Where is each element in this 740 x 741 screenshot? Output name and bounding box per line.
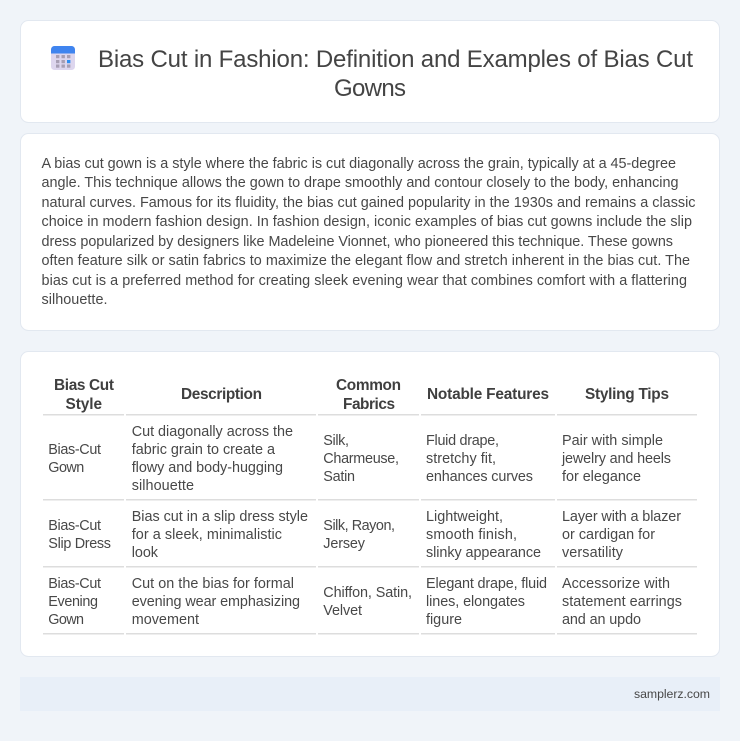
table row: bias-cut evening gown: movement bbox=[132, 612, 199, 628]
table row: bias-cut gown: enhances curves bbox=[426, 469, 533, 485]
table header: Description bbox=[181, 386, 262, 403]
text block: definition paragraph: angle. This technique allows the gown to drape smoothly and contour closely to the body, enhancing bbox=[42, 175, 678, 191]
table row: bias-cut evening gown: Gown bbox=[48, 612, 84, 628]
table row: bias-cut gown: fabric grain to create a bbox=[132, 442, 275, 458]
table header: Common bbox=[336, 377, 401, 394]
table row: bias-cut gown: silhouette bbox=[132, 478, 194, 494]
table row: bias-cut gown: Satin bbox=[323, 469, 355, 485]
footer bbox=[20, 677, 720, 711]
table row: bias-cut gown: Silk, bbox=[323, 433, 349, 449]
table header: Notable Features bbox=[427, 386, 549, 403]
table row: bias-cut gown: for elegance bbox=[562, 469, 641, 485]
table row: bias-cut slip dress: or cardigan for bbox=[562, 527, 655, 543]
text block: definition paragraph: often feature silk or satin fabrics to maximize the elegant flow and stretch inherent in the bias cut. The bbox=[42, 253, 690, 269]
text block: definition paragraph: A bias cut gown is a style where the fabric is cut diagonally across the grain, typically at a 45-degree bbox=[42, 156, 676, 172]
text block: definition paragraph: choice in modern fashion design. In fashion design, iconic examples of bias cut gowns include the slip bbox=[42, 214, 692, 230]
table row: bias-cut evening gown: Chiffon, Satin, bbox=[323, 585, 412, 601]
table row: bias-cut slip dress: slinky appearance bbox=[426, 545, 541, 561]
table row: bias-cut slip dress: versatility bbox=[562, 545, 624, 561]
table row: bias-cut slip dress: Lightweight, bbox=[426, 509, 503, 525]
footer: samplerz.com bbox=[634, 687, 710, 701]
table header bbox=[43, 377, 697, 416]
text block: definition paragraph: dress popularized by designers like Madeleine Vionnet, who pioneered this technique. These gowns bbox=[42, 234, 673, 250]
table row: bias-cut gown: stretchy fit, bbox=[426, 451, 496, 467]
title bbox=[98, 46, 693, 102]
table row: bias-cut evening gown: evening wear emphasizing bbox=[132, 594, 300, 610]
table row: bias-cut evening gown: Velvet bbox=[323, 603, 362, 619]
table row: bias-cut slip dress: Slip Dress bbox=[48, 536, 111, 552]
title: Bias Cut in Fashion: Definition and Examples of Bias Cut bbox=[98, 46, 693, 73]
title: Gowns bbox=[334, 75, 406, 102]
table row: bias-cut evening gown: Accessorize with bbox=[562, 576, 670, 592]
table header: Style bbox=[66, 396, 102, 413]
table row: bias-cut slip dress bbox=[43, 509, 697, 568]
panel: introduction text bbox=[20, 134, 720, 330]
table row: bias-cut evening gown: Bias-Cut bbox=[48, 576, 101, 592]
table row: bias-cut gown: Charmeuse, bbox=[323, 451, 399, 467]
panel: bias cut styles table bbox=[20, 352, 720, 656]
table row: bias-cut slip dress: Layer with a blazer bbox=[562, 509, 681, 525]
table row: bias-cut slip dress: for a sleek, minimalistic bbox=[132, 527, 282, 543]
table row: bias-cut evening gown: Cut on the bias for formal bbox=[132, 576, 294, 592]
table row: bias-cut slip dress: smooth finish, bbox=[426, 527, 517, 543]
table row: bias-cut gown bbox=[43, 424, 697, 500]
text block: definition paragraph: bias cut is a preferred method for creating sleek evening wear that combines comfort with a flattering bbox=[42, 273, 687, 289]
text block: definition paragraph: silhouette. bbox=[42, 292, 108, 308]
table row: bias-cut evening gown: figure bbox=[426, 612, 462, 628]
table row: bias-cut slip dress: Jersey bbox=[323, 536, 366, 552]
panel: title card bbox=[20, 20, 720, 122]
text block: definition paragraph: natural curves. Famous for its fluidity, the bias cut gained popularity in the 1930s and remains a classic bbox=[42, 195, 696, 211]
table header: Styling Tips bbox=[585, 386, 669, 403]
table row: bias-cut gown: jewelry and heels bbox=[561, 451, 671, 467]
table row: bias-cut slip dress: Bias cut in a slip dress style bbox=[132, 509, 308, 525]
table row: bias-cut gown: Pair with simple bbox=[562, 433, 663, 449]
table row: bias-cut slip dress: Silk, Rayon, bbox=[323, 518, 395, 534]
table row: bias-cut gown: Gown bbox=[48, 460, 84, 476]
table row: bias-cut gown: Bias-Cut bbox=[48, 442, 101, 458]
table row: bias-cut evening gown: lines, elongates bbox=[426, 594, 525, 610]
icon: calendar bbox=[51, 46, 75, 70]
table row: bias-cut slip dress: Bias-Cut bbox=[48, 518, 101, 534]
table row: bias-cut gown: flowy and body-hugging bbox=[132, 460, 283, 476]
table row: bias-cut gown: Cut diagonally across the bbox=[132, 424, 293, 440]
text block: definition paragraph bbox=[42, 156, 696, 308]
table row: bias-cut evening gown bbox=[43, 576, 697, 634]
table header: Fabrics bbox=[343, 396, 395, 413]
table row: bias-cut evening gown: statement earrings bbox=[562, 594, 682, 610]
table row: bias-cut gown: Fluid drape, bbox=[426, 433, 499, 449]
table row: bias-cut evening gown: Elegant drape, fluid bbox=[426, 576, 547, 592]
table row: bias-cut slip dress: look bbox=[132, 545, 159, 561]
table row: bias-cut evening gown: and an updo bbox=[562, 612, 641, 628]
table row: bias-cut evening gown: Evening bbox=[48, 594, 98, 610]
table header: Bias Cut bbox=[54, 377, 114, 394]
